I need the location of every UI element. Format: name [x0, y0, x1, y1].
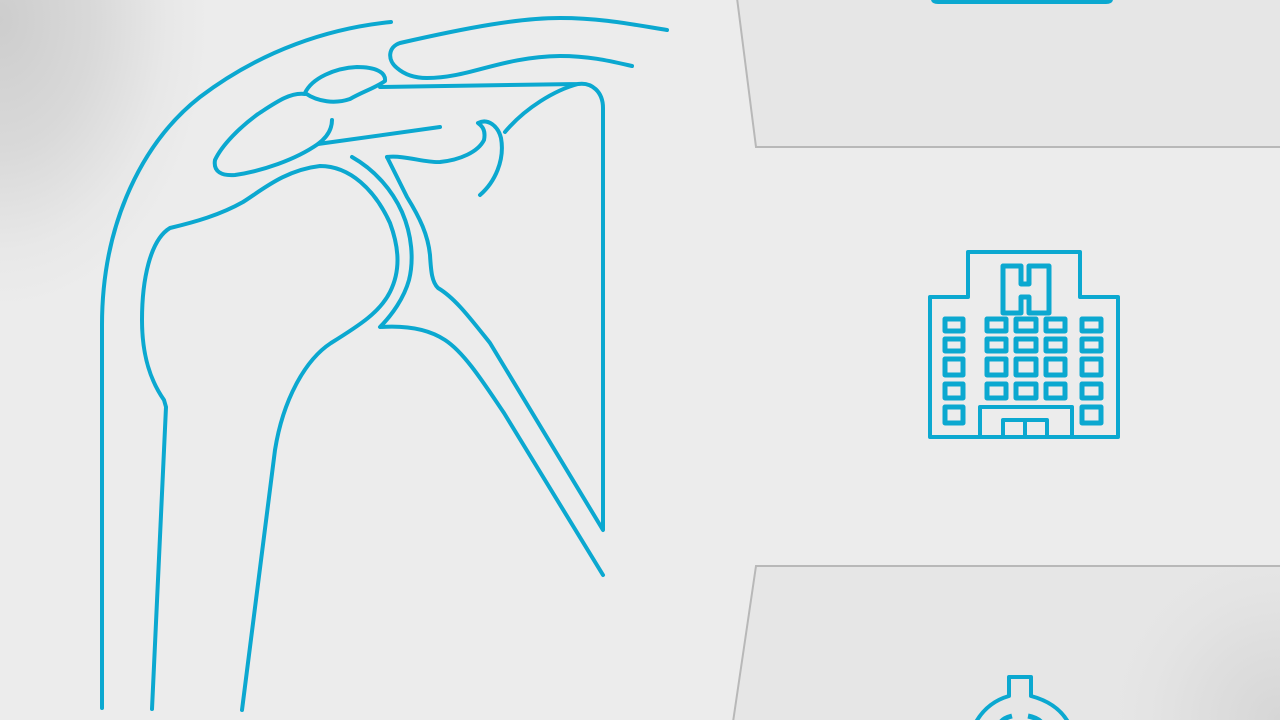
coracoid process [387, 121, 502, 195]
clavicle [390, 18, 667, 78]
building outline [930, 252, 1118, 437]
labrum arc [352, 157, 603, 575]
icon: top card bar fragment [931, 0, 1113, 4]
deltoid outer contour [102, 22, 391, 708]
entrance [980, 407, 1072, 437]
windows centre block [987, 319, 1065, 398]
icon: hospital building [930, 252, 1118, 437]
humerus [142, 166, 398, 710]
acromion hook [318, 120, 332, 144]
icon: bottom card symbol [976, 677, 1068, 720]
icon: shoulder joint anatomy [102, 18, 667, 710]
scapula [380, 84, 603, 530]
windows right column [1082, 319, 1101, 423]
windows left column [945, 319, 963, 423]
hospital H sign [1003, 266, 1049, 313]
acromioclavicular ellipse [305, 67, 385, 102]
panel: bottom card [733, 566, 1280, 720]
panel: top card [737, 0, 1280, 147]
acromion [215, 94, 440, 175]
scapular spine edge [505, 84, 578, 132]
